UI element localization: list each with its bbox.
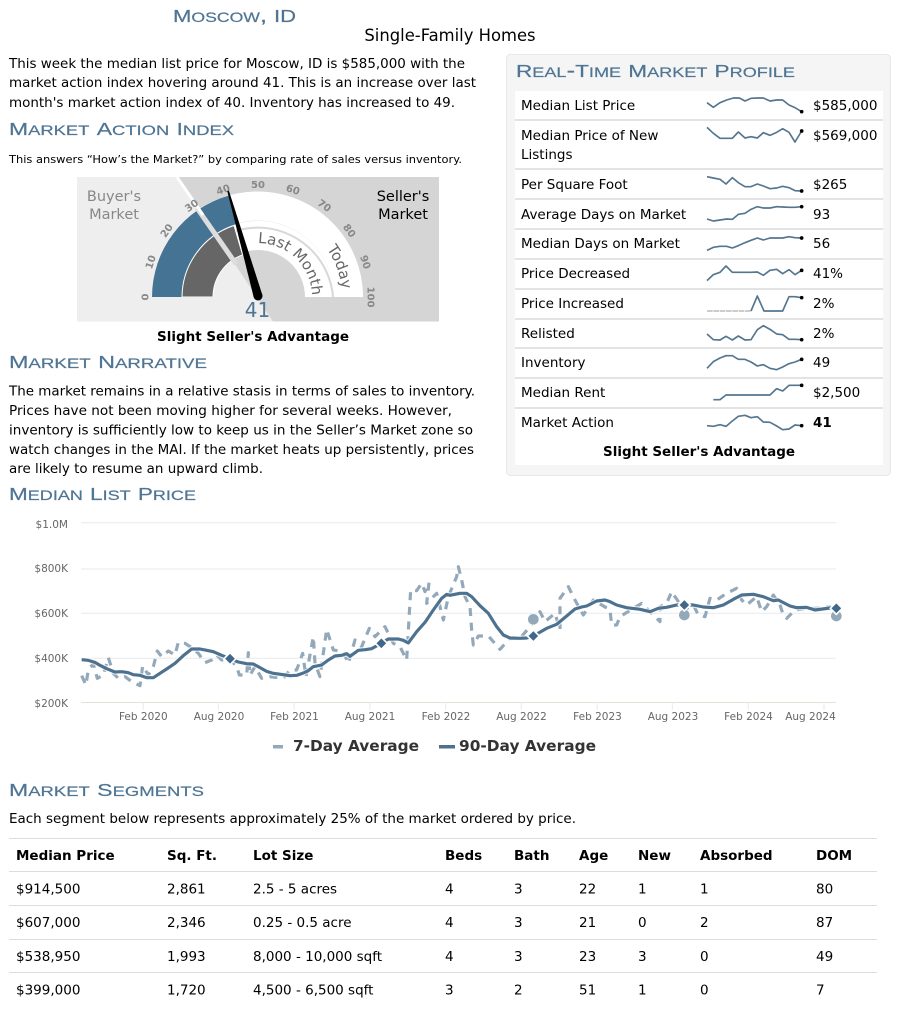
row: per square foot: $265 [813, 177, 847, 193]
row: market action [521, 415, 832, 431]
gauge tick labels: 50 [251, 180, 265, 191]
row: average days on market [521, 205, 830, 223]
gauge tick labels: 80 [340, 222, 357, 240]
chart grid and axes [81, 523, 836, 710]
panel caption: Slight Seller's Advantage [603, 444, 795, 460]
narrative paragraph [8, 384, 475, 477]
gauge: market action index [77, 177, 439, 322]
table row 1: 1 [700, 882, 709, 898]
gauge label: buyer's market [87, 189, 141, 223]
narrative paragraph: watch changes in the MAI. If the market heats up persistently, prices [9, 442, 474, 458]
gauge tick labels: 100 [364, 287, 376, 307]
x axis labels: Aug 2020 [194, 711, 244, 723]
table row 3: $538,950 [16, 949, 80, 965]
row: market action: Market Action [521, 415, 614, 431]
table row 4: 2 [514, 982, 523, 998]
segments description: Each segment below represents approximately 25% of the market ordered by price. [9, 811, 576, 827]
x axis labels: Aug 2023 [648, 711, 698, 723]
table row 1: 4 [445, 882, 454, 898]
gauge tick labels: 70 [315, 198, 333, 215]
x axis labels: Aug 2021 [345, 711, 395, 723]
row: price decreased: 41% [813, 266, 843, 282]
table header: Beds [445, 848, 482, 864]
table row 2: 87 [816, 915, 833, 931]
gauge tick labels: 0 [140, 293, 152, 300]
heading: median list price: Median List Price [9, 483, 196, 505]
row: median price of new listings: Listings [521, 147, 573, 163]
row: average days on market: Average Days on Market [521, 207, 686, 223]
table row 1: 2,861 [167, 882, 206, 898]
row: average days on market: 93 [813, 207, 830, 223]
gauge label: seller's market: Market [378, 207, 428, 223]
y axis labels: $600K [34, 608, 69, 620]
chart diamond markers: 90-day [224, 599, 842, 665]
y axis labels: $800K [34, 563, 69, 575]
table header: Median Price [16, 848, 115, 864]
gauge value: 41 [245, 298, 270, 322]
line chart: median list price [34, 519, 842, 723]
chart legend: 7-Day Average [293, 737, 419, 755]
7-day average dashed line [82, 567, 836, 686]
gauge blue arc: today value [152, 196, 236, 297]
gauge caption: Slight Seller's Advantage [157, 329, 349, 345]
x axis labels: Feb 2023 [573, 711, 622, 723]
panel heading: Real- Time Market Profile [516, 60, 795, 82]
table: market segments [9, 838, 877, 998]
gauge grey arc: last month value [182, 226, 243, 297]
table row 2: 2 [700, 915, 709, 931]
table row 1 [16, 882, 833, 898]
row: per square foot [521, 177, 847, 193]
gauge tick labels: 10 [144, 254, 159, 271]
x axis labels [119, 711, 836, 723]
table row 1: 2.5 - 5 acres [253, 882, 337, 898]
gauge slit at 30 [197, 208, 236, 264]
row: median price of new listings [521, 127, 877, 163]
market action description: This answers “How’s the Market?” by comparing rate of sales versus inventory. [8, 153, 462, 166]
table row 2 [16, 915, 833, 931]
table row 4: 3 [445, 982, 454, 998]
table header: New [638, 848, 671, 864]
gauge tick labels [140, 180, 376, 307]
gauge label: seller's market: Seller's [377, 189, 429, 205]
table row 3: 1,993 [167, 949, 206, 965]
heading: market action index: Market Action Index [9, 118, 235, 140]
x axis labels: Feb 2020 [119, 711, 168, 723]
gauge separator ring [182, 228, 333, 297]
x axis labels: Feb 2021 [270, 711, 319, 723]
table row 2: 0 [638, 915, 647, 931]
row: median price of new listings: $569,000 [813, 128, 877, 144]
table header: Lot Size [253, 848, 313, 864]
table row 4: 7 [816, 982, 825, 998]
gauge label: seller's market [377, 189, 429, 223]
table row 1: 22 [579, 882, 596, 898]
table row 3: 8,000 - 10,000 sqft [253, 949, 382, 965]
table row 4: 4,500 - 6,500 sqft [253, 982, 373, 998]
table row 3: 49 [816, 949, 833, 965]
row: per square foot: Per Square Foot [521, 177, 628, 193]
panel rows background [515, 91, 883, 465]
table row 1: $914,500 [16, 882, 80, 898]
x axis labels: Feb 2022 [422, 711, 470, 723]
row: median list price: Median List Price [521, 98, 635, 114]
table row 3: 3 [514, 949, 523, 965]
row: median rent: Median Rent [521, 385, 605, 401]
table row 2: $607,000 [16, 915, 80, 931]
gauge white arc: last month track [182, 221, 334, 297]
table row 1: 3 [514, 882, 523, 898]
intro paragraph: market action index hovering around 41. This is an increase over last [9, 75, 476, 91]
chart legend: 90-Day Average [459, 737, 596, 755]
table row 2: 3 [514, 915, 523, 931]
gauge arc label: today: Today [329, 242, 350, 288]
subtitle: Single-Family Homes [364, 26, 536, 45]
gauge needle [227, 191, 262, 300]
narrative paragraph: The market remains in a relative stasis in terms of sales to inventory. [8, 384, 475, 400]
x axis labels: Feb 2024 [724, 711, 773, 723]
row: market action: 41 [813, 415, 832, 431]
y axis labels: $400K [34, 653, 69, 665]
table header: Absorbed [700, 848, 773, 864]
table row 2: 4 [445, 915, 454, 931]
gauge tick labels: 90 [357, 254, 372, 271]
narrative paragraph: inventory is sufficiently low to keep us in the Seller’s Market zone so [9, 422, 473, 438]
table row 4: 1,720 [167, 982, 206, 998]
table header: DOM [816, 848, 852, 864]
table row 4: 1 [638, 982, 647, 998]
gauge tick labels: 30 [183, 198, 201, 215]
chart legend [273, 737, 596, 755]
row: inventory: Inventory [521, 355, 585, 371]
table row 1: 1 [638, 882, 647, 898]
narrative paragraph: Prices have not been moving higher for several weeks. However, [9, 403, 452, 419]
row: median rent: $2,500 [813, 385, 860, 401]
row: relisted [521, 326, 835, 342]
x axis labels: Aug 2022 [496, 711, 547, 723]
table header [16, 848, 852, 864]
row: median list price [521, 98, 877, 114]
heading: market narrative: Market Narrative [9, 351, 207, 373]
panel: real-time market profile [506, 54, 890, 476]
gauge label: buyer's market: Market [89, 207, 139, 223]
row: price decreased: Price Decreased [521, 266, 630, 282]
chart circle markers: 7-day [528, 609, 842, 625]
table row 4: $399,000 [16, 982, 80, 998]
table header: Sq. Ft. [167, 848, 217, 864]
gauge tick labels: 40 [215, 183, 232, 198]
row: price increased: 2% [813, 296, 835, 312]
table row 3: 23 [579, 949, 596, 965]
gauge white arc: today track [152, 192, 363, 297]
y axis labels [34, 519, 69, 710]
table row 2: 2,346 [167, 915, 206, 931]
table row 3: 0 [700, 949, 709, 965]
row: median list price: $585,000 [813, 98, 877, 114]
row: median days on market: Median Days on Market [521, 236, 680, 252]
table row 4 [16, 982, 825, 998]
row: price decreased [521, 266, 843, 282]
table row 2: 0.25 - 0.5 acre [253, 915, 352, 931]
table header: Bath [514, 848, 549, 864]
gauge label: buyer's market: Buyer's [87, 189, 141, 205]
heading: market segments: Market Segments [9, 779, 204, 801]
gauge tick labels: 20 [159, 222, 176, 240]
table row 3 [16, 949, 833, 965]
gauge arc label: last month: Last Month [259, 232, 323, 294]
narrative paragraph: are likely to resume an upward climb. [9, 461, 263, 477]
row: median days on market [521, 236, 830, 252]
y axis labels: $200K [34, 698, 69, 710]
gauge tick labels: 60 [284, 183, 301, 198]
row: median rent [521, 383, 860, 401]
row: median price of new listings: Median Price of New [521, 128, 658, 144]
table row 2: 21 [579, 915, 596, 931]
table row 4: 0 [700, 982, 709, 998]
table header: Age [579, 848, 608, 864]
intro paragraph: month's market action index of 40. Inventory has increased to 49. [9, 95, 455, 111]
row: price increased [521, 296, 835, 312]
row: relisted: Relisted [521, 326, 575, 342]
90-day average halo [82, 593, 836, 678]
90-day average line [82, 593, 836, 678]
intro paragraph [8, 56, 476, 111]
table row 3: 4 [445, 949, 454, 965]
intro paragraph: This week the median list price for Moscow, ID is $585,000 with the [8, 56, 465, 72]
row: inventory: 49 [813, 355, 830, 371]
row: inventory [521, 355, 830, 371]
row: price increased: Price Increased [521, 296, 624, 312]
row: relisted: 2% [813, 326, 835, 342]
table row 4: 51 [579, 982, 596, 998]
table row 1: 80 [816, 882, 833, 898]
row: median days on market: 56 [813, 236, 830, 252]
x axis labels: Aug 2024 [785, 711, 836, 723]
table row 3: 3 [638, 949, 647, 965]
title: Moscow, ID [173, 5, 296, 27]
y axis labels: $1.0M [36, 519, 68, 531]
